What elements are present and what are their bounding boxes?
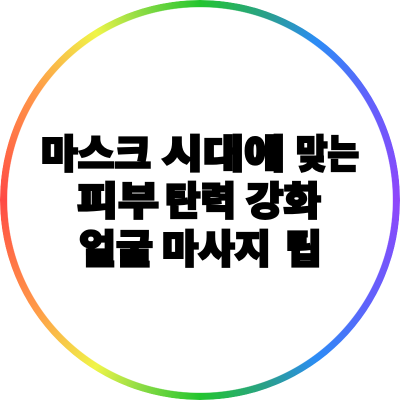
title line 3: 마사지 bbox=[162, 229, 271, 272]
title line 2: 강화 bbox=[246, 181, 321, 224]
title line 3 bbox=[79, 229, 322, 272]
title line 2: 탄력 bbox=[165, 181, 236, 224]
title line 1: 맞는 bbox=[296, 134, 359, 177]
title line 3: 팁 bbox=[285, 229, 322, 272]
title line 1: 시대에 bbox=[162, 134, 285, 177]
title line 3: 얼굴 bbox=[79, 229, 153, 272]
title line 2 bbox=[77, 181, 321, 224]
title line 2: 피부 bbox=[77, 181, 159, 224]
title line 1: 마스크 bbox=[41, 134, 151, 177]
title line 1 bbox=[41, 134, 359, 177]
